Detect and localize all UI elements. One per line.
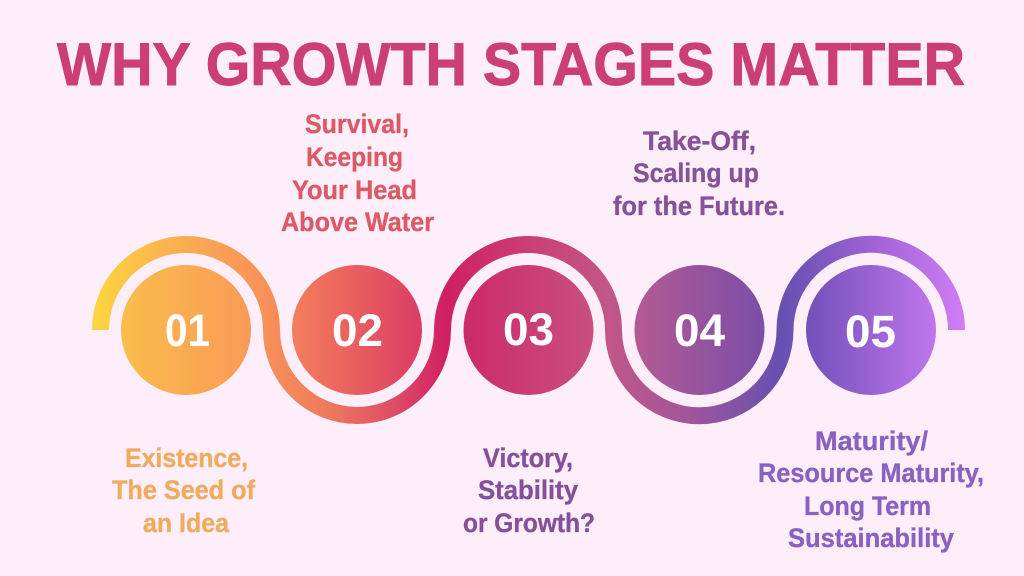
label: stage 03 victory: Stability (478, 475, 578, 505)
label: stage 03 victory (463, 443, 595, 538)
stage 02 circle: 02 (332, 305, 383, 356)
label: stage 05 maturity: Maturity/ (815, 426, 928, 456)
label: stage 04 take-off: Scaling up (633, 158, 759, 188)
label: stage 01 existence: The Seed of (112, 475, 256, 505)
label: stage 02 survival: Survival, (305, 109, 409, 139)
label: stage 01 existence: Existence, (125, 443, 248, 473)
label: stage 02 survival: Your Head (292, 175, 417, 205)
stage 04 circle: 04 (674, 305, 725, 356)
label: stage 01 existence: an Idea (143, 508, 230, 538)
label: stage 04 take-off: for the Future. (613, 191, 785, 221)
stage 03 circle (464, 265, 594, 395)
label: stage 03 victory: or Growth? (463, 508, 595, 538)
label: stage 04 take-off: Take-Off, (643, 126, 756, 156)
label: stage 02 survival: Above Water (281, 207, 434, 237)
label: stage 02 survival: Keeping (306, 142, 403, 172)
label: stage 05 maturity: Long Term (804, 491, 931, 521)
stage 03 circle: 03 (503, 304, 554, 355)
label: stage 05 maturity: Sustainability (788, 523, 954, 553)
label: stage 03 victory: Victory, (483, 443, 573, 473)
stage 02 circle (292, 265, 422, 395)
title: WHY GROWTH STAGES MATTER (57, 31, 965, 98)
label: stage 04 take-off (613, 126, 785, 221)
label: stage 02 survival (281, 109, 434, 237)
stage 05 circle (806, 265, 936, 395)
wavy ribbon connecting stages (100, 244, 956, 416)
stage 04 circle (634, 265, 764, 395)
stage 01 circle (121, 265, 251, 395)
label: stage 05 maturity (758, 426, 984, 553)
stage 05 circle: 05 (845, 306, 896, 357)
label: stage 05 maturity: Resource Maturity, (758, 458, 984, 488)
label: stage 01 existence (112, 443, 256, 538)
stage 01 circle: 01 (165, 305, 210, 356)
